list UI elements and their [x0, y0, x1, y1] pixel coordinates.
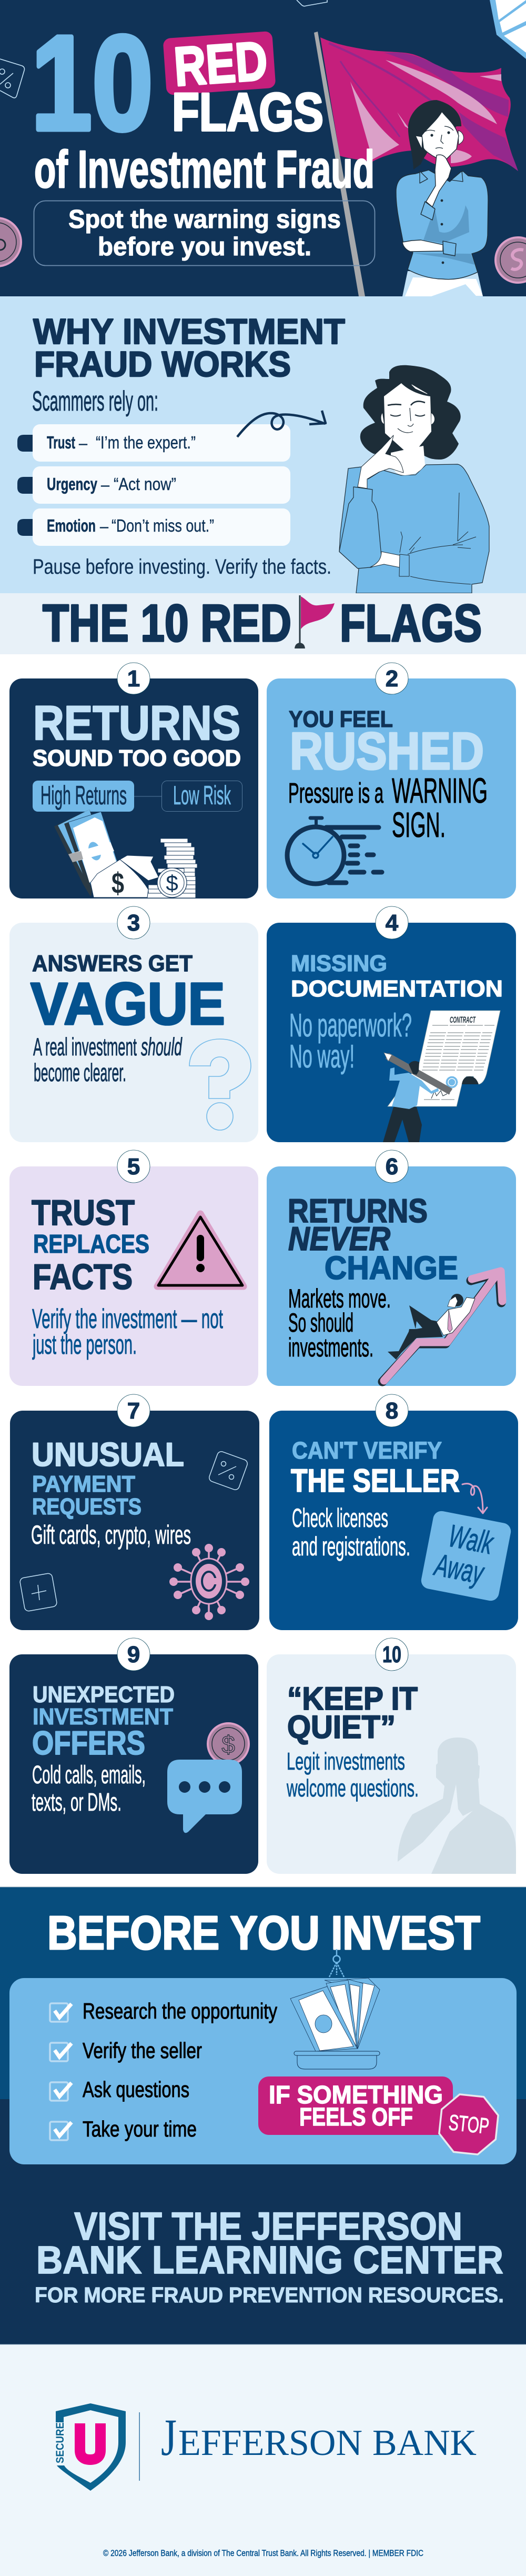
illustration: reclining man — [388, 1294, 475, 1360]
icon: stop sign: STOP — [448, 2110, 490, 2139]
subtitle box — [34, 201, 375, 265]
number badge 9: 9 — [127, 1642, 140, 1668]
title word FLAGS: FLAGS — [172, 82, 323, 142]
illustration: man carrying pen — [383, 1053, 456, 1142]
card 10: keep it quiet — [267, 1638, 516, 1874]
body line 2: welcome questions. — [286, 1774, 419, 1802]
shirt — [437, 1297, 475, 1335]
away: Away — [431, 1546, 488, 1591]
badge: RED — [163, 30, 276, 98]
face features — [388, 401, 425, 433]
call to action line 2: BANK LEARNING CENTER — [36, 2238, 503, 2282]
contract title: CONTRACT — [450, 1015, 476, 1025]
icon: coin — [208, 1723, 249, 1764]
logo: jefferson bank wordmark — [161, 2408, 477, 2467]
bowl — [294, 2051, 380, 2069]
number badge 4: 4 — [386, 910, 399, 936]
big word: VAGUE — [31, 971, 225, 1037]
number badge 8 — [376, 1394, 408, 1427]
card 4: missing documentation — [267, 906, 516, 1142]
secure label: SECURE — [54, 2422, 66, 2463]
number badge 7: 7 — [127, 1398, 140, 1424]
heading: YOU FEEL — [289, 706, 393, 732]
illustration: money — [54, 810, 197, 900]
intro text: Scammers rely on: — [32, 386, 158, 417]
heading line 1: UNEXPECTED — [33, 1682, 175, 1708]
tie — [448, 1310, 452, 1332]
connector — [134, 796, 161, 797]
body line 1: Check licenses — [292, 1503, 388, 1533]
heading TRUST: TRUST — [32, 1193, 135, 1233]
heading line 1: CAN'T VERIFY — [292, 1437, 442, 1464]
subheading: SOUND TOO GOOD — [33, 745, 241, 771]
big coin: $ — [166, 871, 178, 895]
heading PAYMENT: PAYMENT — [32, 1471, 135, 1497]
head — [448, 1294, 463, 1307]
number badge 4 — [376, 906, 408, 939]
body line 2: just the person. — [32, 1330, 137, 1360]
face — [384, 383, 431, 452]
list item: trust: – — [79, 435, 87, 452]
lower hand — [370, 552, 400, 567]
banner text left: THE 10 RED — [43, 594, 291, 652]
checklist item 3: Ask questions — [83, 2077, 189, 2102]
logo: jefferson bank wordmark: BANK — [372, 2423, 477, 2463]
body line 1: Markets move. — [288, 1284, 391, 1313]
body emphasis: should — [141, 1033, 183, 1061]
sleeve — [339, 487, 381, 568]
list item: trust: “I’m the expert.” — [96, 433, 196, 452]
walk: Walk — [446, 1518, 497, 1561]
heading CHANGE: CHANGE — [325, 1250, 458, 1286]
label: high returns — [33, 781, 134, 812]
title line: of Investment Fraud — [34, 140, 375, 199]
body line 1: Verify the investment — not — [32, 1304, 223, 1334]
banknotes — [54, 810, 95, 896]
resting hand — [402, 240, 443, 252]
silhouette — [398, 1738, 516, 1874]
body line 1: No paperwork? — [289, 1007, 412, 1044]
sweater folds — [400, 493, 476, 584]
flag pole — [314, 32, 365, 296]
checklist item 4: Take your time — [83, 2116, 197, 2141]
illustration: thinking woman — [396, 100, 488, 296]
body line 1: Legit investments — [287, 1748, 405, 1775]
heading REPLACES: REPLACES — [33, 1230, 149, 1259]
coin stack — [147, 838, 197, 898]
heading line 2: INVESTMENT — [33, 1704, 173, 1730]
body line 2: So should — [288, 1308, 353, 1337]
collar — [420, 171, 463, 183]
paper band — [68, 842, 114, 862]
checklist item 2 — [50, 2038, 202, 2063]
heading line 1: MISSING — [291, 951, 387, 976]
heading line 2: DOCUMENTATION — [291, 976, 503, 1002]
icon: small flag — [295, 595, 335, 648]
list item: urgency: Urgency — [47, 474, 97, 494]
footer — [0, 2344, 526, 2576]
body text: Pressure is a — [288, 777, 384, 809]
card 9: unexpected investment offers — [9, 1638, 258, 1874]
number badge 6: 6 — [386, 1154, 398, 1180]
callout line 2: FEELS OFF — [299, 2103, 413, 2131]
money bag — [120, 855, 159, 881]
logo: jefferson bank wordmark: J — [161, 2408, 177, 2467]
sweater — [339, 464, 489, 593]
pen — [387, 1056, 451, 1092]
card 6: returns never change — [267, 1150, 516, 1386]
subtitle line 1: Spot the warning signs — [68, 205, 341, 234]
logo: jefferson bank wordmark: EFFERSON — [178, 2423, 362, 2463]
icon: percent tile — [208, 1451, 248, 1491]
number badge 5 — [117, 1150, 150, 1183]
shirt — [389, 1067, 439, 1109]
call to action line 1: VISIT THE JEFFERSON — [74, 2204, 462, 2248]
arrow — [462, 1484, 487, 1513]
banner: the 10 red flags — [0, 593, 526, 654]
banner text right: FLAGS — [340, 594, 482, 652]
icon: chat bubble — [167, 1760, 242, 1833]
heading line 2: THE SELLER — [291, 1463, 460, 1499]
list item: trust — [17, 424, 290, 462]
icon: stopwatch — [287, 818, 382, 884]
list item: emotion — [17, 508, 290, 546]
copyright: © 2026 Jefferson Bank, a division of The Central Trust Bank. All Rights Reserved. | MEMBER FDIC — [103, 2548, 423, 2558]
raised arm and hand — [426, 155, 451, 207]
icon: crypto hub — [169, 1544, 249, 1620]
list item: emotion: Emotion — [47, 516, 96, 535]
checklist item 2: Verify the seller — [83, 2038, 202, 2063]
card 3: answers get vague — [9, 906, 258, 1142]
panel: why investment fraud works — [0, 296, 526, 593]
number badge 10: 10 — [382, 1642, 401, 1668]
panel: checklist — [9, 1978, 517, 2164]
heading line 1: WHY INVESTMENT — [33, 312, 345, 352]
list item: trust: Trust — [47, 433, 75, 452]
heading line 2: QUIET” — [287, 1709, 396, 1745]
heading REQUESTS: REQUESTS — [32, 1494, 141, 1520]
face features — [425, 126, 453, 148]
divider — [139, 2412, 140, 2481]
heading line 3: OFFERS — [32, 1725, 145, 1762]
trousers — [388, 1305, 443, 1360]
card 5: trust replaces facts — [9, 1150, 258, 1386]
checklist item 1 — [50, 1999, 277, 2023]
icon: stop sign — [438, 2093, 500, 2156]
card 1: returns sound too good — [9, 663, 258, 900]
list item: urgency: – — [101, 476, 109, 494]
card 7: unusual payment requests — [10, 1394, 259, 1630]
ears — [416, 131, 463, 149]
number badge 8: 8 — [386, 1398, 398, 1424]
arrow — [237, 411, 326, 437]
body text: Gift cards, crypto, wires — [31, 1520, 191, 1550]
heading UNUSUAL: UNUSUAL — [32, 1436, 184, 1473]
second cuff — [443, 241, 456, 256]
heading RETURNS: RETURNS — [288, 1193, 428, 1230]
checklist item 4 — [50, 2116, 197, 2141]
panel: before you invest — [0, 1886, 526, 2344]
icon: coin: $ — [221, 1731, 235, 1758]
hair — [408, 100, 461, 169]
neck — [391, 446, 425, 475]
card 2: you feel rushed — [267, 663, 516, 898]
legs — [383, 1107, 422, 1142]
icon: percent tile left — [0, 59, 24, 98]
label: low risk — [162, 781, 242, 812]
closing text: Pause before investing. Verify the facts. — [33, 555, 331, 578]
label: high returns: High Returns — [41, 781, 127, 810]
number badge 3: 3 — [127, 910, 140, 936]
number badge 2: 2 — [386, 666, 398, 692]
body line 2: and registrations. — [292, 1532, 410, 1561]
illustration: flag — [320, 37, 518, 171]
ears — [381, 413, 434, 424]
hair highlight — [412, 385, 427, 394]
body line 3: investments. — [288, 1333, 373, 1362]
dollar sign on bag: $ — [112, 866, 124, 900]
body line 1: Cold calls, emails, — [32, 1761, 146, 1789]
number badge 6 — [376, 1150, 408, 1183]
list item: emotion: “Don’t miss out.” — [112, 516, 214, 535]
logo: secure u shield — [54, 2403, 126, 2491]
illustration: smiling woman — [339, 365, 489, 593]
body line 1: A real investment — [33, 1033, 137, 1061]
icon: cash fan top right — [490, 0, 526, 59]
title number 10: 10 — [31, 8, 153, 158]
cuff — [421, 202, 435, 220]
icon: plus tile — [19, 1573, 57, 1612]
checklist item 3 — [50, 2077, 189, 2102]
pointing hand — [358, 435, 403, 488]
big coin — [157, 868, 187, 897]
icon: percent tile top — [297, 0, 327, 6]
heading line 1: “KEEP IT — [287, 1681, 418, 1716]
shirt buttons — [441, 199, 444, 264]
shirt — [396, 170, 488, 279]
body line 2: texts, or DMs. — [32, 1789, 122, 1816]
heading: RETURNS — [33, 696, 240, 750]
chain — [329, 1949, 344, 1977]
checklist item 1: Research the opportunity — [83, 1999, 277, 2023]
illustration: money on scale — [290, 1949, 380, 2069]
big word: RUSHED — [290, 722, 484, 780]
head — [409, 1061, 419, 1075]
callout: walk away tile — [420, 1510, 512, 1602]
list item: emotion: – — [100, 518, 108, 535]
face — [422, 112, 459, 159]
icon: question mark — [189, 1039, 251, 1130]
panel: hero header — [0, 0, 526, 296]
cuff — [399, 545, 463, 576]
label: low risk: Low Risk — [173, 781, 231, 810]
card 8: can't verify the seller — [269, 1394, 518, 1630]
heading NEVER: NEVER — [288, 1221, 390, 1257]
number badge 10 — [376, 1638, 408, 1671]
number badge 7 — [117, 1394, 150, 1427]
number badge 1: 1 — [127, 666, 140, 692]
number badge 5: 5 — [127, 1154, 140, 1180]
icon: coin left — [0, 218, 21, 266]
body line 2: No way! — [289, 1039, 355, 1075]
illustration: contract — [388, 1011, 500, 1106]
subtitle line 2: before you invest. — [98, 233, 311, 261]
number badge 3 — [117, 906, 150, 939]
number badge 1 — [117, 663, 150, 694]
call to action line 3: FOR MORE FRAUD PREVENTION RESOURCES. — [35, 2283, 504, 2307]
number badge 2 — [376, 663, 408, 694]
shirt shadow — [423, 205, 469, 243]
word sign: SIGN. — [392, 805, 446, 845]
letter U — [80, 2423, 100, 2460]
heading FACTS: FACTS — [33, 1257, 133, 1297]
list item: urgency — [17, 466, 290, 504]
callout: if something feels off — [258, 2076, 453, 2135]
notes — [290, 1978, 380, 2051]
body line 2: become clearer. — [34, 1059, 126, 1086]
callout line 1: IF SOMETHING — [269, 2081, 443, 2109]
illustration: rising arrow — [382, 1271, 502, 1382]
seal — [446, 1076, 458, 1088]
heading: ANSWERS GET — [32, 951, 193, 976]
pants — [402, 271, 483, 296]
hair — [360, 365, 461, 460]
number badge 9 — [117, 1638, 150, 1671]
icon: coin right — [495, 237, 526, 283]
list item: urgency: “Act now” — [114, 474, 176, 494]
icon: warning triangle — [157, 1214, 244, 1286]
title word RED: RED — [172, 31, 269, 98]
heading line 2: FRAUD WORKS — [34, 344, 291, 384]
